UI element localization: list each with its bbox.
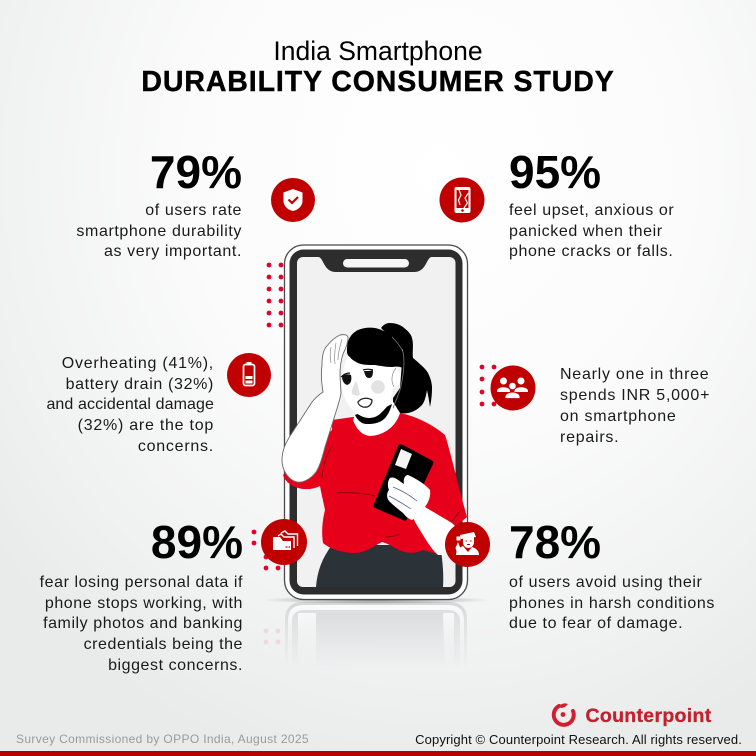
icon: battery: [227, 353, 271, 397]
text: top concerns: and accidental damage: [46, 396, 214, 413]
forearm: [413, 507, 456, 555]
text: top concerns: (32%) are the top: [78, 417, 214, 434]
stat: 95% upset: panicked when their: [509, 223, 663, 240]
icon: distressed man: [445, 522, 490, 567]
icon: people: [490, 366, 536, 410]
stat: 89% data loss: [40, 516, 243, 674]
fingers: [330, 339, 342, 364]
cheek: [371, 380, 385, 394]
stat: 79% durability: smartphone durability: [76, 223, 242, 240]
woman illustration: [282, 323, 467, 587]
stat: 89% data loss: fear losing personal data if: [40, 574, 243, 591]
stat: 79% durability: of users rate: [145, 202, 242, 219]
reflected dots: [264, 629, 280, 644]
stat: 95% upset: [509, 146, 674, 260]
stat: 78% harsh conditions: due to fear of damage.: [509, 615, 683, 632]
icon: folders: [261, 519, 307, 565]
mouth: [358, 398, 372, 407]
icon: shield: [271, 178, 315, 222]
dot grid top left: [267, 263, 283, 327]
phone camera card: [395, 449, 412, 469]
stat: 78% harsh conditions: phones in harsh conditions: [509, 595, 715, 612]
stat: 79% durability: [76, 146, 242, 260]
stat: 78% harsh conditions: [509, 516, 715, 632]
stat: 95% upset: 95%: [509, 146, 601, 198]
text: repair spending: Nearly one in three: [560, 366, 709, 382]
neck shadow: [355, 404, 392, 424]
stat: 78% harsh conditions: 78%: [509, 516, 601, 568]
text: repair spending: on smartphone: [560, 408, 676, 424]
stat: 89% data loss: biggest concerns.: [108, 657, 243, 674]
collar: [353, 400, 400, 436]
stat: 89% data loss: 89%: [151, 516, 243, 568]
phone body: [284, 245, 468, 600]
Counterpoint logo: Counterpoint: [586, 705, 712, 727]
handheld phone: [374, 444, 433, 521]
bottom red bar: [0, 751, 756, 756]
stat: 89% data loss: family photos and banking: [43, 615, 243, 632]
text: top concerns: concerns.: [138, 438, 214, 455]
hand: [387, 475, 430, 520]
raised arm and hand: [282, 335, 348, 482]
copyright: Copyright © Counterpoint Research. All rights reserved.: [415, 732, 742, 747]
hair outline: [392, 337, 404, 408]
dot grid lower left: [252, 530, 280, 570]
shirt: [283, 413, 467, 555]
phone reflection: [285, 602, 467, 672]
text: top concerns: [46, 355, 214, 455]
ear line: [392, 368, 396, 387]
ponytail: [381, 323, 432, 413]
phone shadow: [262, 596, 490, 604]
title: DURABILITY CONSUMER STUDY: [141, 66, 615, 98]
text: repair spending: spends INR 5,000+: [560, 386, 710, 404]
nose shade: [352, 381, 360, 396]
shirt folds: [322, 446, 461, 537]
eyes and brows: [342, 374, 351, 385]
text: top concerns: Overheating (41%),: [62, 355, 214, 372]
title: India Smartphone: [273, 36, 483, 66]
stat: 89% data loss: phone stops working, with: [45, 595, 243, 612]
icon: cracked phone: [440, 178, 484, 222]
dot grid right: [480, 365, 496, 406]
face: [342, 350, 400, 418]
finger lines: [389, 487, 417, 509]
text: repair spending: [560, 366, 710, 446]
stat: 89% data loss: credentials being the: [84, 636, 243, 653]
source note: Survey Commissioned by OPPO India, August 2025: [16, 732, 309, 746]
text: repair spending: repairs.: [560, 428, 619, 446]
stat: 78% harsh conditions: of users avoid using their: [509, 574, 702, 591]
stat: 95% upset: feel upset, anxious or: [509, 202, 674, 219]
stat: 95% upset: phone cracks or falls.: [509, 243, 673, 260]
stat: 79% durability: as very important.: [104, 243, 242, 260]
title: [141, 36, 615, 98]
text: top concerns: battery drain (32%): [66, 376, 214, 393]
hair: [347, 328, 404, 368]
stat: 79% durability: 79%: [150, 146, 242, 198]
trousers: [316, 545, 443, 587]
